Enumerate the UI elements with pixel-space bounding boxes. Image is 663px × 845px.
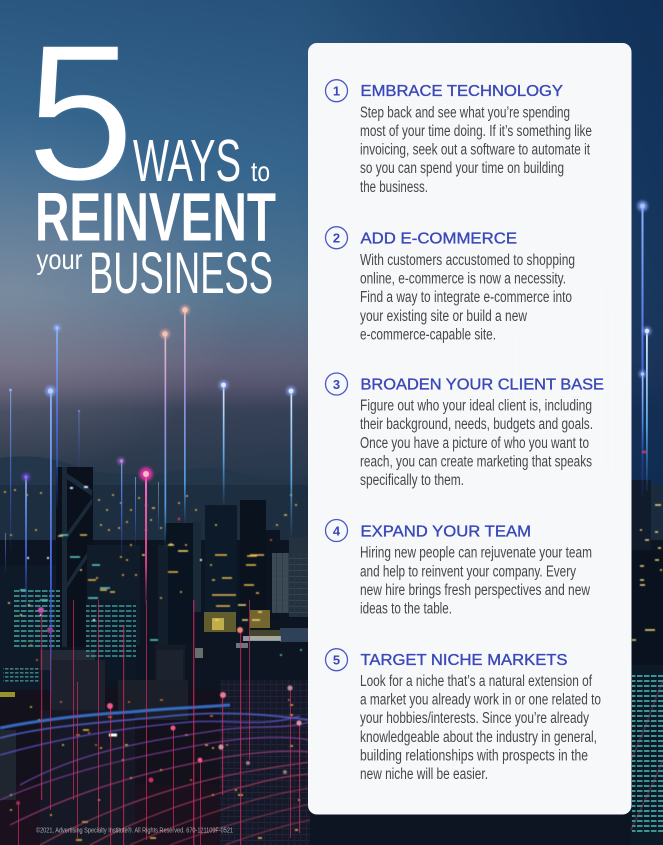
body 1: most of your time doing. If it’s something like (360, 123, 592, 140)
body 5: knowledgeable about the industry in general, (360, 729, 597, 746)
number badge 4 (326, 520, 348, 542)
vertical light beams: lower pink (18, 600, 300, 845)
item 3: broaden your client base (326, 373, 604, 489)
title: BUSINESS (89, 241, 273, 306)
body 1: so you can spend your time on building (360, 160, 564, 177)
heading 3: BROADEN YOUR CLIENT BASE (360, 376, 604, 394)
body 2 (360, 252, 575, 343)
body 2: online, e-commerce is now a necessity. (360, 271, 566, 288)
copyright footer: ©2021, Advertising Specialty Institute®. All Rights Reserved. 670-121109F-0521 (36, 826, 233, 834)
body 1: the business. (360, 179, 428, 196)
number badge 3 (326, 373, 348, 395)
scattered city lights (4, 452, 662, 840)
body 2: e-commerce-capable site. (360, 326, 496, 343)
body 5: Look for a niche that’s a natural extension of (360, 673, 593, 690)
title: WAYS (133, 127, 241, 194)
number badge 1 (326, 80, 348, 102)
body 5: your hobbies/interests. Since you’re already (360, 710, 589, 727)
dark lower city base (0, 540, 663, 845)
distant hills (0, 456, 310, 560)
body 4: Hiring new people can rejuvenate your team (360, 545, 592, 562)
body 3: specifically to them. (360, 472, 464, 489)
body 2: Find a way to integrate e-commerce into (360, 289, 572, 306)
buildings (0, 565, 58, 690)
body 2: With customers accustomed to shopping (360, 252, 575, 269)
vertical light beams: upper (5, 206, 648, 701)
body 1 (360, 104, 592, 196)
body 2: your existing site or build a new (360, 308, 528, 325)
heading 5: TARGET NICHE MARKETS (360, 652, 568, 669)
body 3: Figure out who your ideal client is, including (360, 398, 592, 415)
light beam heads: upper (9, 201, 651, 481)
number badge 4: 4 (333, 523, 341, 538)
body 4: new hire brings fresh perspectives and new (360, 582, 591, 599)
body 3: reach, you can create marketing that speaks (360, 453, 592, 470)
number badge 2 (326, 227, 348, 249)
title: to (251, 156, 270, 187)
title (26, 4, 276, 306)
title: your (36, 244, 82, 275)
teal office windows (13, 588, 60, 650)
panel: five ways (308, 43, 632, 814)
body 1: invoicing, seek out a software to automate it (360, 142, 591, 159)
number badge 5: 5 (333, 652, 340, 668)
body 4: and help to reinvent your company. Every (360, 563, 576, 580)
faint beams showing through panel (514, 285, 614, 472)
yellow lit podium (204, 612, 236, 632)
item 5: target niche markets (326, 649, 601, 783)
body 3 (360, 398, 593, 489)
body 5: building relationships with prospects in the (360, 747, 588, 764)
body 3: Once you have a picture of who you want to (360, 435, 589, 452)
body 5 (360, 673, 601, 783)
light beam heads: lower pink (16, 607, 302, 805)
body 1: Step back and see what you’re spending (360, 104, 570, 121)
title: 5 (26, 4, 134, 222)
number badge 1: 1 (333, 84, 340, 98)
heading 2: ADD E-COMMERCE (360, 230, 517, 247)
item 4: expand your team (326, 520, 592, 618)
body 4 (360, 545, 592, 618)
body 4: ideas to the table. (360, 600, 452, 618)
title: REINVENT (35, 179, 276, 256)
number badge 5 (326, 649, 348, 671)
item 2: add e-commerce (326, 227, 575, 343)
heading 1: EMBRACE TECHNOLOGY (360, 83, 563, 100)
item 1: embrace technology (326, 80, 592, 196)
body 5: new niche will be easier. (360, 766, 488, 783)
number badge 3: 3 (333, 377, 340, 392)
number badge 2: 2 (333, 230, 340, 246)
heading 4: EXPAND YOUR TEAM (360, 524, 531, 541)
light streaks across the lower city (0, 680, 663, 845)
body 3: their background, needs, budgets and goals. (360, 416, 593, 433)
city skyline photo (0, 452, 663, 845)
